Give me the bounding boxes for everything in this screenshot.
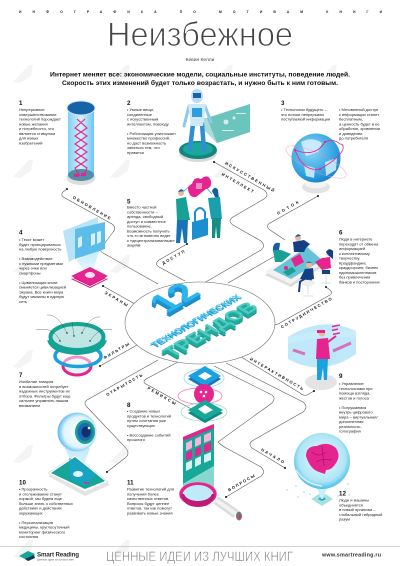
item 3 text: а ценность будет в ее xyxy=(339,121,380,126)
item 10 text: состояния xyxy=(19,534,38,539)
icon: eye over phone xyxy=(48,412,110,496)
heading: trends: ТРЕНДОВ xyxy=(158,302,264,363)
heading: technologies: ТЕХНОЛОГИЧЕСКИХ xyxy=(149,294,245,350)
heading: 12: 12 xyxy=(139,277,209,318)
item 8 text: 8 xyxy=(127,402,131,409)
item 1 text: является стимулом xyxy=(19,131,55,136)
item 7 text: и возможностей потребует xyxy=(19,384,69,389)
item 2 text: заняться тем, что xyxy=(127,145,160,150)
item 1 text: новые желания xyxy=(19,121,48,126)
item 8 text: путем сочетания уже xyxy=(127,418,167,423)
item 4 text: сеть xyxy=(19,299,27,304)
footer logo: Ценные идеи из лучших книг xyxy=(37,558,74,562)
item 7 text: отбора. Фильтры будут еще xyxy=(19,393,71,398)
item 10 text: окружающих xyxy=(19,510,43,515)
item 10 text: мониторинг физического xyxy=(19,529,66,534)
item 6 text: творчеству. xyxy=(339,256,360,260)
item 11 text xyxy=(127,480,174,515)
item 7 text xyxy=(19,372,71,408)
item 4 text: будут связаны в единую xyxy=(19,294,64,299)
item 4 text: • Текст может xyxy=(19,237,44,242)
path labels xyxy=(72,161,333,492)
item 11 text: качественных ответов. xyxy=(127,496,169,501)
item 12 text: глобальный гибридный xyxy=(339,512,382,517)
item 11 text: получения более xyxy=(127,491,160,496)
item 3 text: • Мгновенный доступ xyxy=(339,107,378,112)
lead text: Интернет меняет все: экономические модели, социальные институты, поведение людей. xyxy=(50,70,350,78)
item 8 text: существующих xyxy=(127,423,155,428)
item 4 text: будет проецироваться xyxy=(19,242,61,247)
item 1 text xyxy=(19,100,61,145)
item 9 text: жестов и голоса xyxy=(339,395,370,400)
item 6 text: 6 xyxy=(339,230,343,236)
footer website: www.smartreading.ru xyxy=(321,552,381,558)
lead text xyxy=(50,70,350,87)
item 7 text: надежных инструментов их xyxy=(19,388,70,394)
author: Кевин Келли xyxy=(186,57,215,63)
item 4 text: Экрана. Все книги мира xyxy=(19,289,64,294)
item 12 text: 12 xyxy=(339,490,346,498)
item 5 text xyxy=(127,198,176,248)
item 5 text: пользование. xyxy=(127,224,152,228)
item 9 text: внутрь цифрового xyxy=(339,410,374,414)
item 3 text: обработке, кривлении xyxy=(339,126,380,131)
item 4 text: с нужными предметами xyxy=(19,261,63,266)
lead text: Скорость этих изменений будет только возрастать, и нужно быть к ним готовым. xyxy=(62,79,338,87)
item 3 text: поступаемой информации xyxy=(281,116,330,122)
item 12 text xyxy=(339,490,382,522)
item 6 text xyxy=(339,230,380,284)
item 2 text: соединенные xyxy=(127,112,153,117)
top caption: ИНФОГРАФИКА ПО МОТИВАМ КНИГИ xyxy=(19,10,383,14)
path labels: ФИЛЬТРЫ xyxy=(102,341,130,360)
icon: remix blocks xyxy=(178,366,227,423)
item 4 text: смартфоны xyxy=(19,270,41,275)
path labels: СОТРУДНИЧЕСТВО xyxy=(280,296,333,329)
item 2 text: множество профессий, xyxy=(127,136,170,140)
item 6 text: Краудфандинг, xyxy=(339,260,367,265)
path labels: ИНТЕЛЛЕКТ xyxy=(221,172,255,194)
item 4 text: на любую поверхность xyxy=(19,246,61,252)
item 9 text: технологиями при xyxy=(339,386,372,391)
line end dots xyxy=(66,161,327,498)
item 4 text: 4 xyxy=(19,230,23,236)
item 1 text: 1 xyxy=(19,100,23,107)
item 4 text: через очки или xyxy=(19,266,47,270)
path labels: ВОПРОСЫ xyxy=(227,473,256,492)
footer logo xyxy=(19,551,79,562)
item 8 text: • Воссоздание событий xyxy=(127,432,170,437)
item 5 text: 5 xyxy=(127,198,131,206)
icon: brain in bubble xyxy=(286,433,350,506)
item 10 text: медицины, круглосуточный xyxy=(19,524,70,530)
path labels: ЭКРАНЫ xyxy=(104,290,129,307)
item 7 text: вниманием xyxy=(19,403,40,408)
item 9 text: реальность, xyxy=(339,424,362,429)
item 5 text: собственности – xyxy=(127,209,158,214)
item 4 text xyxy=(19,230,66,304)
item 2 text: интеллектом, повсюду xyxy=(127,121,169,126)
item 11 text: ответов, так как помогут xyxy=(127,506,172,510)
item 6 text: краудсорсинг, бизнес xyxy=(339,265,378,270)
item 2 text: • Умные вещи, xyxy=(127,107,154,112)
item 1 text: и потребности, что xyxy=(19,126,55,131)
item 3 text: к информации станет xyxy=(339,112,379,117)
item 9 text: • Погружаемся xyxy=(339,405,366,410)
item 3 text: до потребителя xyxy=(339,136,368,140)
item 3 text: это потоки непрерывно xyxy=(281,112,325,117)
icon: robot with screen xyxy=(179,89,250,162)
item 4 text: • Цивилизация книги xyxy=(19,280,57,285)
item 2 text: нравится xyxy=(127,150,144,155)
item 6 text: информацией xyxy=(339,246,365,251)
item 3 text: 3 xyxy=(281,100,285,107)
item 5 text: аренда, свободный xyxy=(127,214,163,219)
item 2 text: но даст возможность xyxy=(127,140,166,145)
item 4 text: сменяется цивилизацией xyxy=(19,284,66,290)
item 5 text: Возможность получить xyxy=(127,228,170,233)
icon: lens filters xyxy=(36,315,112,375)
item 3 text: • Технологии будущего – xyxy=(281,107,327,112)
item 6 text: к коллективному xyxy=(339,251,370,256)
heading: trends: ТРЕНДОВ xyxy=(158,303,264,365)
item 5 text: доступ и совместное xyxy=(127,219,167,224)
item 10 text: и отслеживание станут xyxy=(19,491,62,496)
item 12 text: разум xyxy=(339,516,350,522)
central ellipse with heading xyxy=(125,277,275,365)
item 2 text: с искусственным xyxy=(127,116,159,122)
item 10 text xyxy=(19,480,73,539)
item 6 text: единомышленников xyxy=(339,270,376,275)
path labels: ОБНОВЛЕНИЕ xyxy=(72,195,112,221)
item 9 text: • Управление xyxy=(339,381,364,386)
item 10 text: нормой, мы будем еще xyxy=(19,496,63,501)
item 5 text: что-то мгновенно ведет xyxy=(127,233,171,238)
item 12 text: Люди и машины xyxy=(339,498,369,502)
path labels: ПОТОК xyxy=(276,199,300,216)
item 6 text: банков и посторонних xyxy=(339,279,380,284)
item 11 text: развивать новые знания xyxy=(127,510,172,515)
item 11 text: Развитие технологий для xyxy=(127,486,174,492)
icon: question cards and magnifier xyxy=(181,424,242,520)
item 1 text: технологий порождает xyxy=(19,116,61,122)
heading: trends: ТРЕНДОВ xyxy=(158,299,264,360)
item 9 text: голография xyxy=(339,428,361,434)
item 10 text: больше знать о собственных xyxy=(19,501,73,506)
item 9 text: помощи взгляда, xyxy=(339,390,370,396)
item 5 text: к «децентрализованным» xyxy=(127,238,176,243)
item 6 text: Люди в интернете xyxy=(339,236,372,242)
footer rule xyxy=(0,546,400,548)
item 12 text: в новый организм – xyxy=(339,507,376,512)
heading: trends: ТРЕНДОВ xyxy=(158,300,264,362)
heading: 12: 12 xyxy=(139,281,209,322)
icon: VR person in curved screen xyxy=(288,324,356,390)
icon: projected screens over pink book xyxy=(63,217,108,288)
item 10 text: действиях и действиях xyxy=(19,506,62,510)
item 1 text: совершенствование xyxy=(19,112,57,117)
item 10 text: • Персонализация xyxy=(19,520,53,525)
item 12 text: объединятся xyxy=(339,502,363,507)
item 8 text xyxy=(127,402,171,442)
item 1 text: изобретений xyxy=(19,140,43,145)
footer logo: Smart Reading xyxy=(37,552,79,558)
path labels: ОТКРЫТОСТЬ xyxy=(105,372,143,397)
item 8 text: продуктов и технологий xyxy=(127,413,171,418)
heading: 12: 12 xyxy=(139,280,209,321)
item 10 text: • Прозрачность xyxy=(19,486,47,492)
item 2 text xyxy=(127,100,176,155)
path labels: ИСКУССТВЕННЫЙ xyxy=(224,161,275,193)
path labels: ИНТЕРАКТИВНОСТЬ xyxy=(249,356,305,391)
item 9 text xyxy=(339,373,378,434)
item 3 text: бесплатным, xyxy=(339,116,363,122)
path labels: РЕМИКСЫ xyxy=(147,386,177,406)
connector lines xyxy=(62,162,331,497)
item 11 text: 11 xyxy=(127,480,134,486)
item 8 text: • Создание новых xyxy=(127,408,160,414)
item 10 text: 10 xyxy=(19,480,26,486)
item 6 text: переходят от обмена xyxy=(339,241,379,246)
footer slogan: ЦЕННЫЕ ИДЕИ ИЗ ЛУЧШИХ КНИГ xyxy=(106,549,294,564)
heading: 12: 12 xyxy=(139,278,209,319)
item 9 text: дополненная xyxy=(339,419,363,424)
icon: people with cloud and lock xyxy=(176,176,222,243)
heading: technologies: ТЕХНОЛОГИЧЕСКИХ xyxy=(149,293,245,349)
item 6 text: без привлечения xyxy=(339,274,370,280)
item 8 text: прошлого xyxy=(127,437,146,442)
item 7 text: сильнее управлять нашим xyxy=(19,398,68,403)
item 7 text: Изобилие товаров xyxy=(19,379,53,384)
item 5 text: Вместо частной xyxy=(127,204,157,210)
item 2 text: • Роботизация уничтожает xyxy=(127,131,176,136)
item 2 text: 2 xyxy=(127,100,131,107)
item 5 text: акциям xyxy=(127,242,141,248)
item 11 text: Вопросы будут ценнее xyxy=(127,501,170,506)
item 9 text: мира – виртуальная/ xyxy=(339,414,378,419)
item 4 text: • Взаимодействие xyxy=(19,256,53,261)
item 3 text xyxy=(281,100,380,140)
item 1 text: для новых xyxy=(19,136,38,140)
item 3 text: и доведении xyxy=(339,131,362,136)
item 1 text: Непрерывное xyxy=(19,107,45,112)
path labels: ДОСТУП xyxy=(161,249,185,266)
item 9 text: 9 xyxy=(339,373,343,380)
icon: DNA tube xyxy=(66,100,96,185)
item 7 text: 7 xyxy=(19,372,23,379)
title: Неизбежное xyxy=(107,16,293,54)
path labels: НАЧАЛО xyxy=(260,447,285,464)
icon: globe xyxy=(282,134,350,194)
icon: team at table xyxy=(265,234,333,296)
